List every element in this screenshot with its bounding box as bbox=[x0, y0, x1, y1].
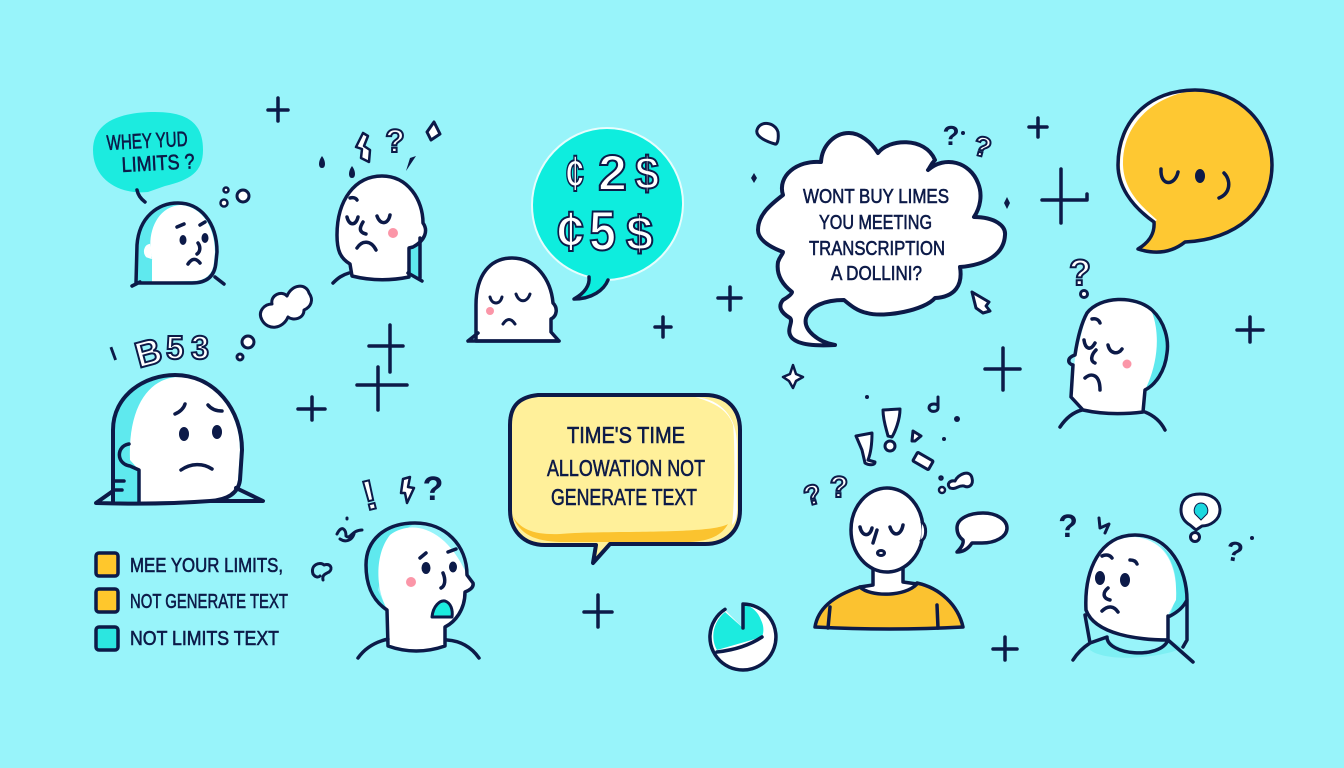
symbols above person: ? bbox=[830, 471, 848, 504]
speech bubble: prices: $ bbox=[626, 208, 653, 261]
thought cloud with question: A DOLLINI? bbox=[831, 263, 922, 285]
character: eyes closed head with symbols: ? bbox=[385, 123, 405, 159]
character: side face with question mark bbox=[1060, 252, 1167, 430]
character: looking up, bottom right: ? bbox=[1058, 508, 1078, 544]
pie chart icon bbox=[710, 600, 776, 670]
small doodles around cloud: ? bbox=[942, 120, 960, 151]
speech bubble: why limits: WHEY YUD bbox=[106, 128, 188, 155]
speech bubble: yellow time allowance bbox=[510, 395, 740, 563]
speech bubble: yellow time allowance: ALLOWATION NOT bbox=[547, 455, 705, 481]
speech bubble: why limits: LIMITS ? bbox=[121, 150, 195, 177]
small doodles around cloud: ? bbox=[970, 130, 995, 164]
speech bubble: prices: ¢ bbox=[566, 145, 584, 201]
small blank speech bubble bbox=[957, 513, 1007, 552]
character: looking up, bottom right bbox=[1058, 494, 1254, 662]
character: side face with question mark: ? bbox=[1069, 252, 1091, 293]
speech bubble: yellow time allowance: TIME'S TIME bbox=[567, 422, 685, 448]
speech bubble: prices bbox=[532, 128, 683, 299]
character: large worried head: 3 bbox=[191, 329, 209, 366]
plus signs scattered bbox=[268, 98, 1263, 660]
legend: NOT LIMITS TEXT bbox=[130, 628, 279, 650]
character: surprised head, bottom: ! bbox=[357, 470, 382, 519]
character: small worried head, top left bbox=[132, 188, 249, 286]
speech bubble: yellow with face bbox=[1118, 90, 1272, 252]
speech bubble: prices: $ bbox=[635, 147, 659, 199]
speech bubble: prices: 2 bbox=[598, 145, 627, 201]
symbols above person: ? bbox=[800, 478, 825, 512]
character: surprised head, bottom: ? bbox=[423, 470, 443, 508]
character: small sleepy head bbox=[468, 258, 559, 341]
speech bubble: prices: 5 bbox=[589, 199, 616, 262]
thought cloud with question: WONT BUY LIMES bbox=[803, 186, 949, 208]
character: person in yellow shirt bbox=[815, 488, 963, 629]
thought cloud with question bbox=[758, 133, 1005, 345]
speech bubble: yellow time allowance: GENERATE TEXT bbox=[551, 484, 697, 510]
thought cloud with question: YOU MEETING bbox=[819, 212, 932, 234]
character: large worried head: B bbox=[130, 329, 166, 376]
symbols above person bbox=[800, 395, 972, 512]
legend: NOT GENERATE TEXT bbox=[130, 591, 288, 613]
character: surprised head, bottom bbox=[312, 470, 479, 658]
character: large worried head: 5 bbox=[166, 329, 184, 366]
legend: MEE YOUR LIMITS, bbox=[130, 555, 283, 577]
small doodles around cloud bbox=[751, 120, 1010, 388]
character: looking up, bottom right: ? bbox=[1224, 535, 1246, 568]
character: eyes closed head with symbols bbox=[319, 122, 440, 283]
legend bbox=[96, 553, 288, 650]
speech bubble: prices: ¢ bbox=[557, 199, 584, 262]
cloud doodle bbox=[237, 286, 311, 360]
thought cloud with question: TRANSCRIPTION bbox=[809, 238, 945, 260]
character: large worried head bbox=[96, 329, 263, 504]
character: large worried head: I bbox=[107, 343, 120, 366]
speech bubble: why limits bbox=[93, 112, 203, 202]
